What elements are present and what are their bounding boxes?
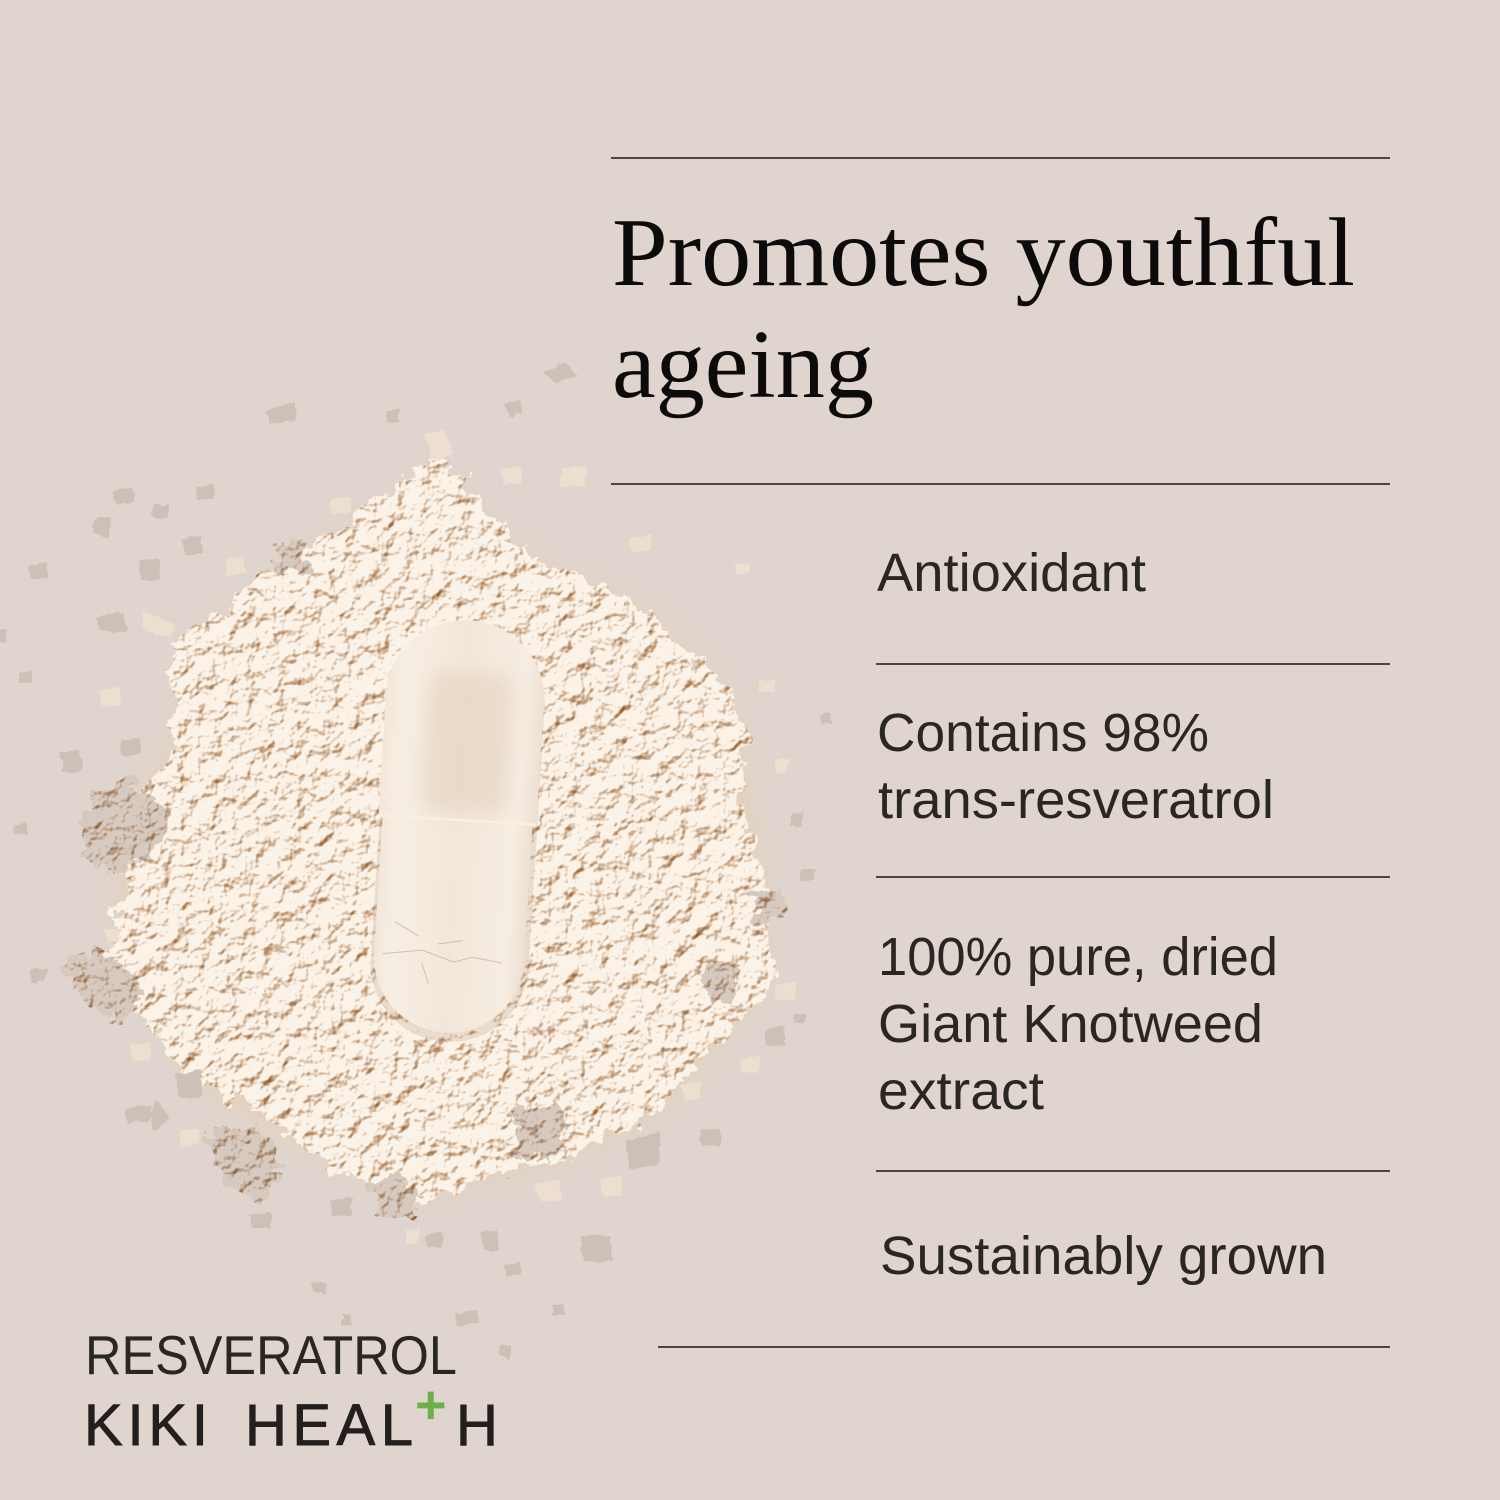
- benefit: pure extract: extract: [878, 1061, 1044, 1121]
- benefit: antioxidant: Antioxidant: [877, 543, 1146, 603]
- benefit: sustainably grown: Sustainably grown: [880, 1226, 1327, 1286]
- capsule seam: [379, 815, 536, 825]
- heading rules: [611, 158, 1390, 484]
- title: [612, 199, 1355, 419]
- brand logo: H: [456, 1393, 498, 1458]
- capsule lower body: [370, 815, 532, 1037]
- benefit: contains 98% trans-resveratrol: trans-resveratrol: [878, 770, 1274, 830]
- large grey rocks: [60, 540, 785, 1225]
- brand logo: HEAL: [245, 1393, 413, 1458]
- capsule cracks: [381, 921, 504, 988]
- logo plus sign: +: [415, 1375, 447, 1435]
- title: ageing: [612, 311, 874, 419]
- benefit: pure extract: Giant Knotweed: [878, 994, 1263, 1054]
- product name: RESVERATROL: [85, 1324, 457, 1386]
- benefit: contains 98% trans-resveratrol: [877, 703, 1274, 830]
- benefit: pure extract: 100% pure, dried: [878, 927, 1278, 987]
- powder pile with scattered crumbs: [0, 362, 832, 1358]
- capsule shadow: [366, 620, 549, 1046]
- capsule upper body: [379, 616, 549, 825]
- capsule: [365, 616, 550, 1046]
- brand logo: [84, 1375, 498, 1458]
- cream crumbs around the mound: [100, 430, 795, 1244]
- brand logo: KIKI: [84, 1393, 208, 1458]
- capsule inner tint: [421, 670, 514, 815]
- title: Promotes youthful: [612, 199, 1355, 307]
- small crumbs: [0, 362, 832, 1358]
- benefit rules: [658, 664, 1390, 1347]
- benefit: pure extract: [878, 927, 1278, 1121]
- powder mound: [100, 450, 775, 1205]
- benefit: contains 98% trans-resveratrol: Contains 98%: [877, 703, 1209, 763]
